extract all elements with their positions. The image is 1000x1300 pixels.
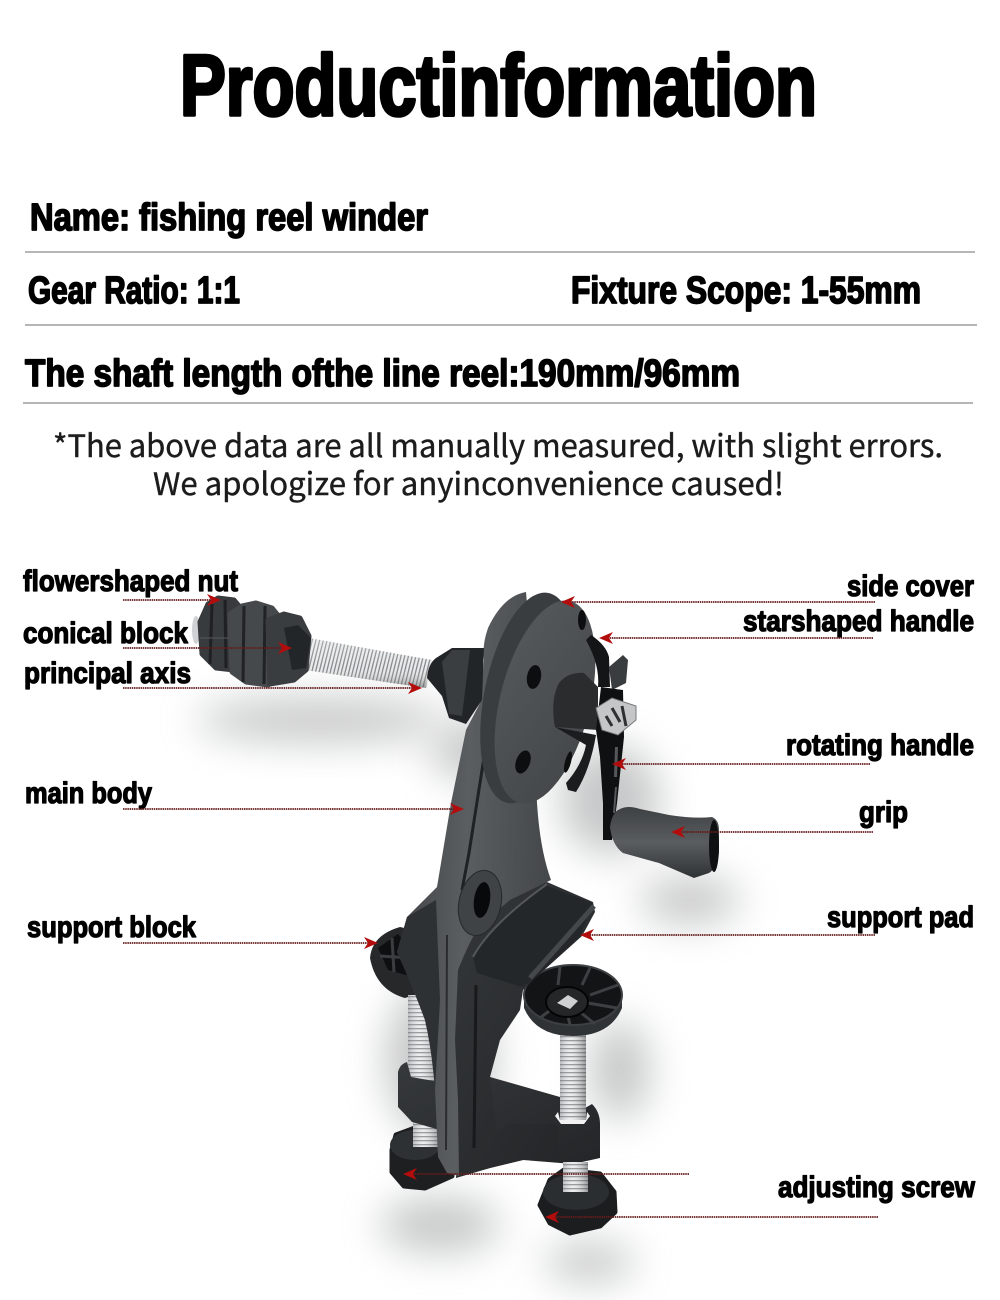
callout: conical block xyxy=(23,617,292,654)
callout: conical block: conical block xyxy=(23,617,188,650)
callout: rotating handle: rotating handle xyxy=(786,729,974,762)
callout: grip xyxy=(671,796,908,838)
conical block xyxy=(268,614,311,684)
callout: side cover: side cover xyxy=(847,570,974,603)
callout: support block xyxy=(27,911,378,949)
callout: support pad xyxy=(580,901,974,941)
callout: grip: grip xyxy=(859,796,908,829)
title: Productinformation xyxy=(180,38,817,134)
left support disc xyxy=(370,927,424,998)
mounting hole xyxy=(453,866,507,940)
callout: flowershaped nut: flowershaped nut xyxy=(23,565,238,598)
handle screw xyxy=(596,698,636,735)
soft shadows xyxy=(195,698,740,1282)
callout: adjusting screw: adjusting screw xyxy=(778,1171,976,1204)
callout: principal axis xyxy=(24,657,422,694)
star-shaped handle xyxy=(553,635,628,792)
spec: shaft length: The shaft length ofthe line reel:190mm/96mm xyxy=(25,353,740,395)
main body xyxy=(397,592,551,1176)
spec: name: Name: fishing reel winder xyxy=(30,197,428,239)
callout: starshaped handle xyxy=(599,605,974,644)
callout: support block: support block xyxy=(27,911,196,944)
left clamp screw xyxy=(408,995,438,1083)
right clamp screw xyxy=(555,1030,590,1124)
spec: fixture scope: Fixture Scope: 1-55mm xyxy=(571,270,921,312)
callout: side cover xyxy=(561,570,974,608)
lower right knob xyxy=(540,1162,615,1233)
product photo: fishing reel winder xyxy=(192,585,740,1282)
callout: rotating handle xyxy=(612,729,974,770)
callout: adjusting screw xyxy=(403,1168,976,1223)
callout: main body xyxy=(25,777,464,815)
callout: principal axis: principal axis xyxy=(24,657,191,690)
lower left screw xyxy=(413,1118,439,1147)
rotating handle arm xyxy=(596,687,624,840)
flower-shaped nut xyxy=(192,598,244,670)
lower left knob xyxy=(390,1128,452,1188)
lower clamp arm xyxy=(398,1062,600,1178)
callout: support pad: support pad xyxy=(827,901,974,934)
shaft boss xyxy=(427,648,484,724)
callout: main body: main body xyxy=(25,777,152,810)
measurement note xyxy=(53,421,943,504)
second nut xyxy=(230,603,284,685)
front clamp block xyxy=(430,882,595,1177)
spec: gear ratio: Gear Ratio: 1:1 xyxy=(28,270,240,312)
grip xyxy=(610,807,719,878)
side cover disc xyxy=(464,585,614,814)
measurement note: *The above data are all manually measured, with slight errors. xyxy=(53,421,943,466)
measurement note: We apologize for anyinconvenience caused! xyxy=(153,459,784,504)
right support disc xyxy=(524,965,622,1036)
horizontal threaded shaft xyxy=(305,638,432,688)
